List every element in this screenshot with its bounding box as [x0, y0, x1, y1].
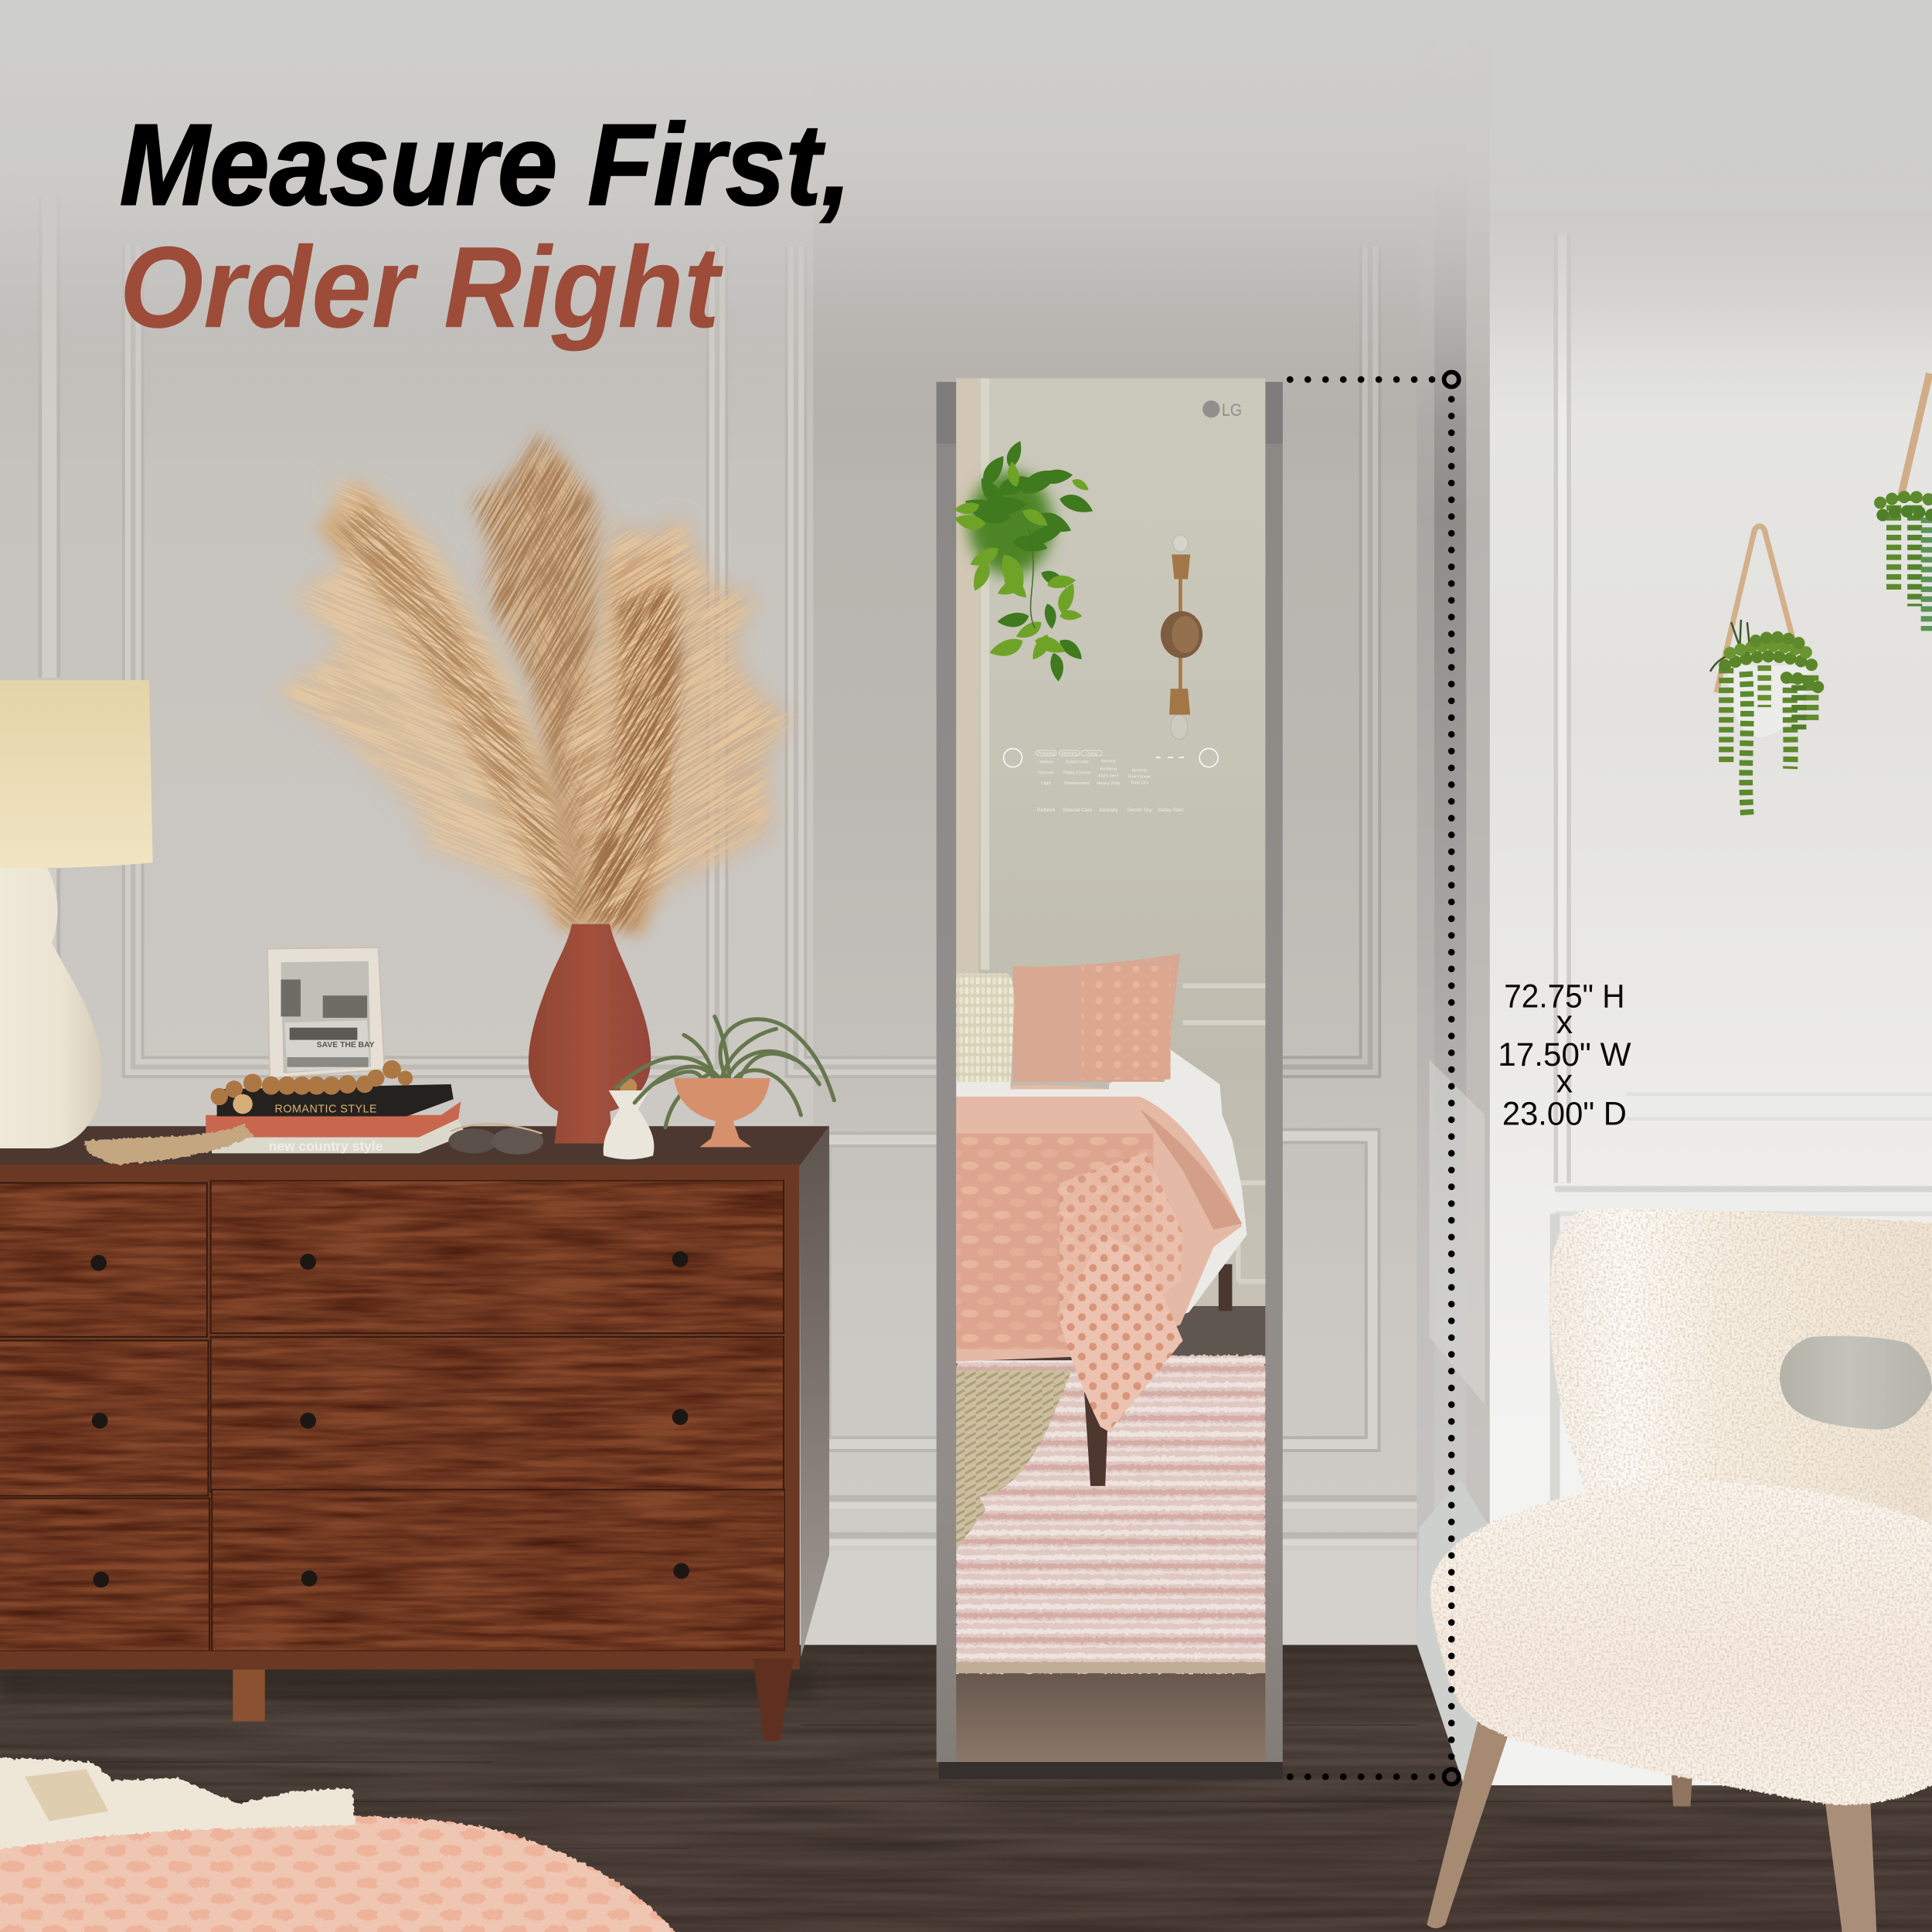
control panel lights: Gentle Dry	[1128, 808, 1152, 813]
top surface	[0, 1126, 829, 1165]
floor	[0, 1645, 1932, 1932]
LG logo: LG	[1222, 400, 1242, 420]
LG logo	[1202, 400, 1242, 420]
reflected floor	[956, 1306, 1265, 1366]
air plant in bowl	[616, 1016, 834, 1147]
control panel lights: Drying	[1086, 752, 1097, 757]
control panel lights: Heavy Duty	[1097, 781, 1121, 786]
stacked books: new country style	[269, 1138, 383, 1154]
pothos plant reflection	[953, 438, 1096, 682]
control panel lights: Downloaded	[1064, 781, 1090, 786]
dresser	[0, 1126, 829, 1741]
stacked books	[206, 1084, 466, 1154]
trailing strings	[1725, 638, 1821, 815]
bottom ring	[1444, 1770, 1459, 1784]
dimensions label: x	[1556, 1004, 1573, 1041]
control panel lights: Normal	[1039, 770, 1053, 775]
white book	[209, 1119, 466, 1153]
stacked books: ROMANTIC STYLE	[275, 1104, 377, 1116]
reflected wall	[956, 378, 1265, 1364]
left plume	[124, 372, 786, 1035]
opening in the back	[1780, 1336, 1932, 1430]
dimensions label	[1498, 978, 1631, 1133]
framed photo: SAVE THE BAY	[317, 1041, 375, 1049]
table lamp	[0, 680, 153, 1148]
dimensions label: x	[1556, 1063, 1573, 1100]
wall shading by the corner	[813, 0, 1491, 1651]
control panel lights: Light	[1041, 781, 1051, 786]
center plume	[260, 374, 821, 981]
beads	[211, 1060, 413, 1105]
lamp base	[0, 862, 102, 1148]
hanging plant right	[1880, 373, 1932, 631]
control panel lights: Kid's Item	[1099, 774, 1118, 779]
photo	[281, 961, 371, 1073]
hanging plant center	[1710, 526, 1821, 815]
wood beads and tassel	[83, 1060, 413, 1165]
right touch ring	[1199, 749, 1218, 767]
control panel lights: Bedding	[1100, 767, 1117, 771]
cream knit pillow	[956, 974, 1014, 1090]
control panel lights: Steaming	[1061, 752, 1078, 757]
tufted throw over bed	[956, 1134, 1153, 1349]
control panel lights: Suits/Coats	[1065, 760, 1089, 765]
title	[120, 100, 852, 352]
baseboard	[801, 1550, 1429, 1645]
dimensions label: 17.50" W	[1498, 1036, 1631, 1073]
side frames	[937, 382, 957, 1762]
boucle chair	[1427, 1209, 1932, 1932]
drawers	[0, 1180, 785, 1651]
woven blanket	[0, 1757, 355, 1851]
bed legs	[1219, 1264, 1232, 1311]
corner column	[1417, 0, 1490, 1781]
dimensions label: 23.00" D	[1502, 1096, 1627, 1133]
control panel lights: Time Dry	[1131, 781, 1148, 786]
reflected rug	[956, 1355, 1265, 1673]
control panel lights: Preparing	[1038, 752, 1055, 757]
control panel lights: Special Care	[1063, 808, 1093, 813]
top ring	[1444, 372, 1459, 387]
control panel lights: Rain/Snow	[1128, 775, 1151, 780]
duvet	[956, 1082, 1242, 1432]
control panel lights: Pants Crease	[1063, 770, 1090, 775]
red book	[206, 1101, 461, 1138]
framed photo	[267, 947, 384, 1078]
white bud vase	[604, 1078, 654, 1159]
mirror steamer closet	[937, 378, 1283, 1779]
white sheets	[1109, 1049, 1247, 1314]
status pills	[1036, 750, 1102, 756]
lamp shade	[0, 680, 153, 868]
wall panel mouldings	[49, 197, 1429, 1543]
tassel	[83, 1124, 253, 1165]
title: Measure First,	[120, 100, 852, 230]
title: Order Right	[120, 222, 724, 352]
control panel lights	[1004, 749, 1218, 813]
dimension guide: dotted bracket	[1290, 372, 1459, 1784]
control panel lights: Delay Start	[1158, 808, 1184, 813]
wall: right section	[1490, 0, 1932, 1787]
wall: left section	[0, 0, 1491, 1651]
pampas grass	[124, 372, 976, 1035]
mirror reflection	[956, 378, 1265, 1762]
terracotta vase	[529, 924, 651, 1144]
leaves	[616, 1016, 834, 1140]
control panel lights: Sanitary	[1099, 808, 1118, 813]
top gradient fade	[0, 0, 1932, 419]
left touch ring	[1004, 749, 1022, 767]
seat cushion	[1430, 1481, 1932, 1804]
bowl	[674, 1078, 770, 1147]
right plume	[380, 413, 976, 1026]
trailing strings	[1880, 495, 1932, 631]
base	[939, 1762, 1283, 1779]
control panel lights: Heavy	[1039, 760, 1053, 765]
control panel lights: Normal	[1132, 769, 1147, 774]
side panel	[800, 1126, 829, 1657]
sconce reflection	[1161, 535, 1202, 740]
decorative pink pillow	[1013, 954, 1180, 1082]
black book	[217, 1084, 454, 1117]
air plant blades	[1710, 620, 1750, 672]
dimensions label: 72.75" H	[1504, 978, 1625, 1015]
jute rug corner	[956, 1370, 1072, 1550]
sunglasses	[448, 1124, 543, 1155]
chair back	[1549, 1209, 1932, 1528]
leather strap	[1716, 526, 1794, 692]
back legs	[1671, 1764, 1693, 1806]
front legs	[1427, 1719, 1511, 1928]
control panel lights: Normal	[1101, 760, 1116, 764]
dresser legs	[233, 1669, 265, 1721]
tufted pouf	[0, 1757, 696, 1932]
right wall panel mouldings	[1555, 234, 1932, 1515]
knobs	[90, 1251, 689, 1587]
white pot	[1727, 665, 1811, 737]
leather strap	[1901, 373, 1930, 495]
control panel lights: Refresh	[1037, 808, 1056, 813]
front body	[0, 1165, 800, 1669]
